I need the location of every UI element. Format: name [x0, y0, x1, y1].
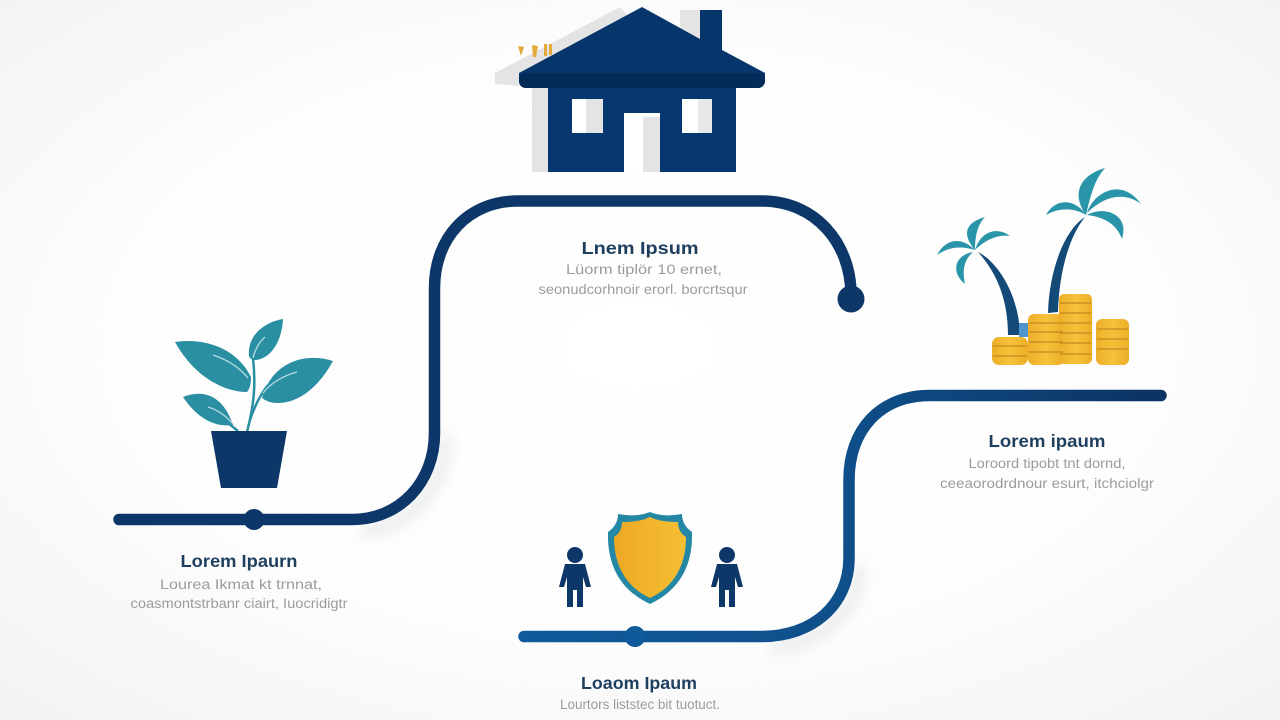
plant stem [228, 358, 268, 432]
text block: bottom step [560, 673, 720, 712]
heading: left step: Lorem Ipaurn [180, 551, 298, 571]
palm trunks [978, 252, 1020, 335]
icon: shield with two people [559, 512, 743, 607]
icon: potted plant [175, 319, 333, 488]
body: left step: Lourea Ikmat kt trnnat, [160, 577, 322, 592]
body: left step [130, 577, 348, 611]
body: left step: coasmontstrbanr ciairt, Iuocridigtr [130, 596, 348, 611]
body: right step: Loroord tipobt tnt dornd, [968, 456, 1126, 471]
plant leaves [175, 319, 333, 425]
body: top step: Lüorm tiplör 10 ernet, [566, 262, 722, 277]
text block: top step [538, 238, 748, 297]
body: top step: seonudcorhnoir erorl. borcrtsqur [538, 282, 748, 297]
body: right step: ceeaorodrdnour esurt, itchciolgr [940, 476, 1155, 491]
path node: shield step [624, 626, 646, 647]
path: lower route [524, 396, 1161, 636]
path shadows [362, 435, 860, 647]
coin stacks [992, 294, 1129, 365]
flowerpot [211, 431, 287, 488]
text block: left step [130, 551, 348, 611]
heading: right step: Lorem ipaum [988, 431, 1106, 451]
path node: plant step [244, 509, 264, 530]
icon: house [495, 7, 765, 172]
palm leaves [937, 168, 1141, 284]
leaf veins [208, 337, 297, 423]
text block: right step [940, 431, 1155, 491]
body: bottom step: Lourtors liststec bit tuotuct. [560, 697, 720, 712]
path: upper route [119, 201, 851, 520]
body: top step [538, 262, 748, 297]
path node: upper route end [838, 286, 864, 312]
heading: bottom step: Loaom Ipaum [581, 673, 697, 693]
icon: palm trees and coins [937, 168, 1141, 365]
body: right step [940, 456, 1155, 491]
heading: top step: Lnem Ipsum [582, 238, 698, 258]
person right [711, 547, 743, 607]
person left [559, 547, 591, 607]
shield [608, 512, 692, 604]
